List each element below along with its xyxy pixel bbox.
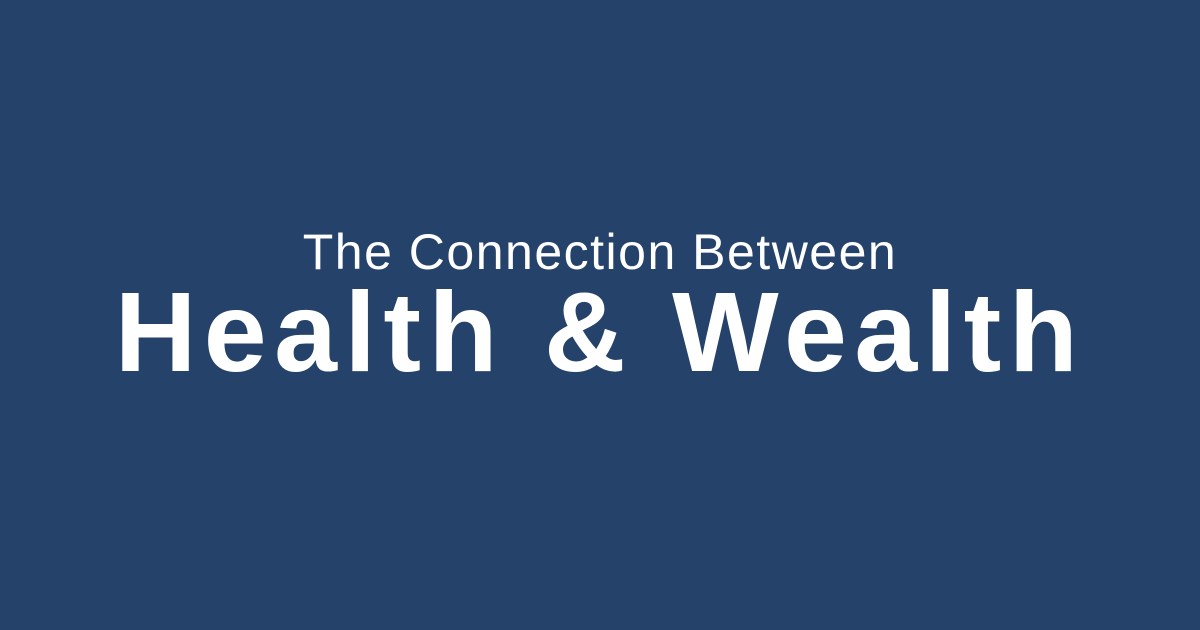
title: Health & Wealth — [115, 269, 1085, 395]
subtitle: The Connection Between — [303, 224, 897, 280]
